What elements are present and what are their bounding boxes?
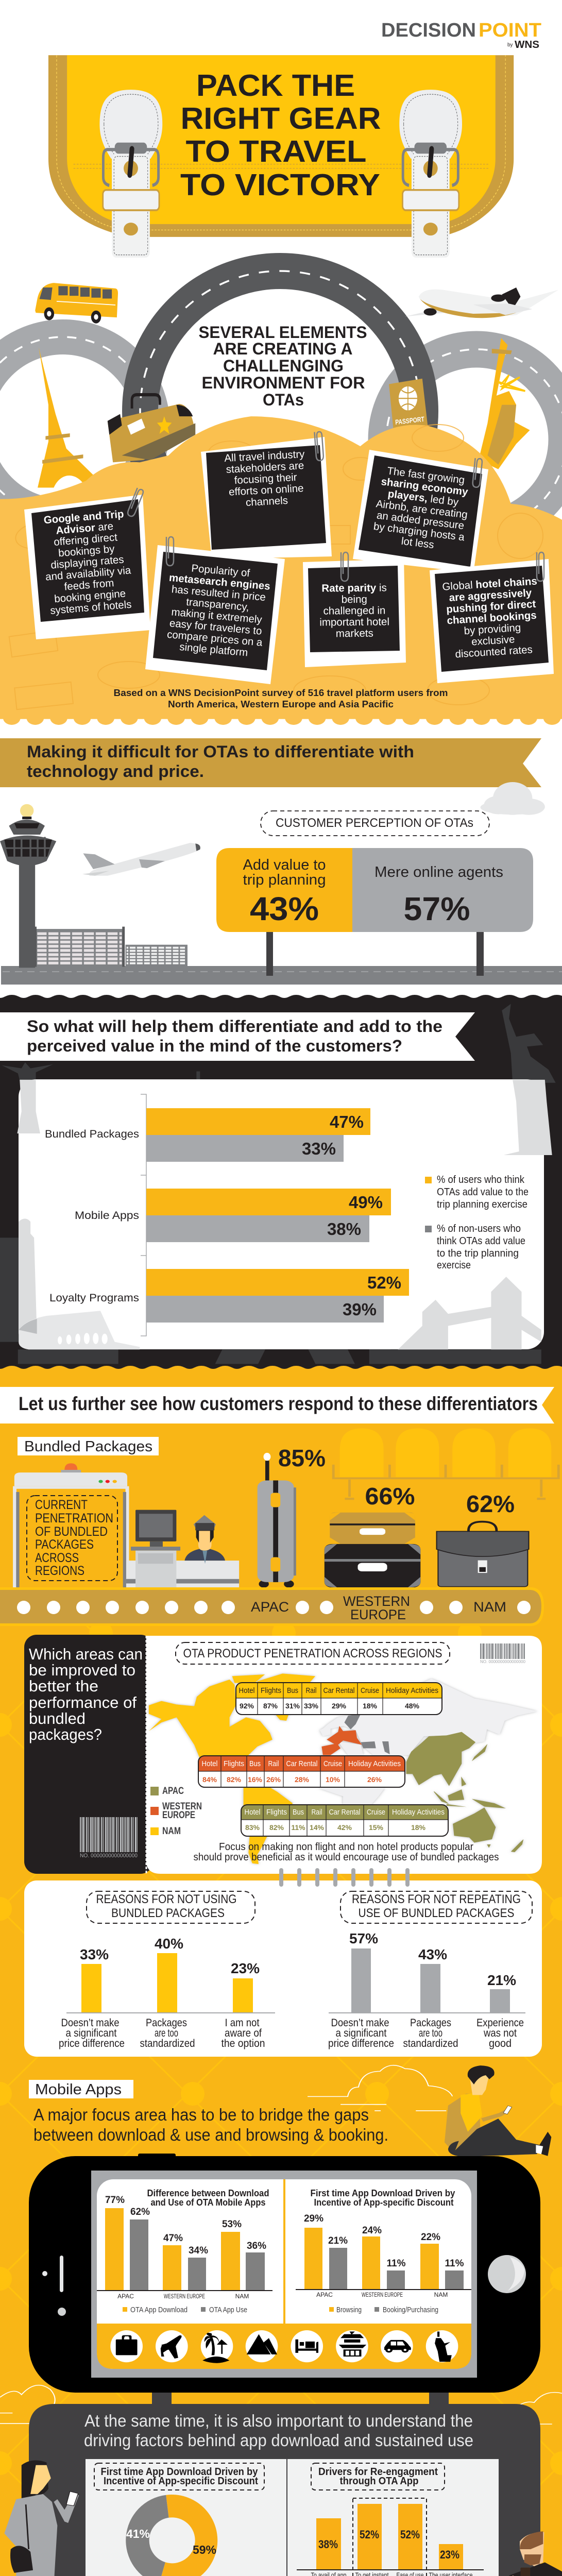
title: PACK THE	[196, 69, 355, 103]
table: Western Europe: Hotel	[202, 1759, 217, 1768]
chart: download vs use: APAC	[117, 2293, 134, 2300]
polaroid: metasearch engines: metasearch engines	[168, 572, 271, 592]
polaroid: google and trip advisor: feeds from	[64, 577, 114, 593]
chart: app download incentive: NAM	[434, 2291, 448, 2298]
table: Western Europe: 26%	[367, 1775, 382, 1784]
icon: statue of liberty	[479, 338, 530, 469]
polaroid: sharing economy: Airbnb, are creating	[376, 498, 468, 521]
polaroid: rate parity: challenged in	[323, 604, 385, 617]
chart: drivers for re-engagement: 23%	[440, 2548, 459, 2561]
chart legend: trip planning exercise	[437, 1199, 527, 1210]
text: major focus area	[33, 2105, 388, 2144]
logo: DecisionPoint by WNS: POINT	[479, 20, 541, 41]
panel: OTA product penetration map: OTA PRODUCT PENETRATION ACROSS REGIONS	[183, 1647, 442, 1660]
hero: travel bag flap	[48, 55, 514, 258]
decorative outline clouds	[0, 2065, 562, 2424]
icon: passport: PASSPORT	[395, 415, 425, 426]
billboard: mere online agents 57%	[352, 848, 533, 932]
table: APAC: 11%	[291, 1823, 305, 1832]
polaroid: metasearch engines: transparency,	[185, 596, 250, 613]
laptop with driver charts	[29, 2404, 540, 2576]
chart: download vs use: 36%	[247, 2241, 266, 2251]
panel: ticket stub question: packages?	[29, 1725, 102, 1743]
panel: reasons for not using / repeating	[24, 1870, 542, 2057]
landmark silhouettes on dark	[0, 1004, 556, 1364]
chart: reasons for not using: the option	[222, 2038, 265, 2049]
tag: mobile apps: Mobile Apps	[35, 2081, 122, 2098]
conveyor belt with region labels: APAC	[251, 1599, 289, 1615]
chart: reasons for not using: BUNDLED PACKAGES	[111, 1906, 225, 1920]
heading: several elements: CHALLENGING	[223, 357, 344, 375]
polaroid: google and trip advisor: systems of hotels	[50, 599, 132, 617]
laptop with driver charts: At the same time, it is also important to understand the	[84, 2411, 473, 2430]
table: Western Europe: Cruise	[323, 1759, 342, 1768]
panel: ticket stub question: Which areas can	[29, 1645, 143, 1663]
chart: reasons for not using: 23%	[231, 1960, 260, 1976]
polaroid: all travel industry stakeholders	[201, 432, 332, 559]
chart: reasons for not repeating: standardized	[403, 2038, 458, 2049]
table: NAM: 92%	[240, 1702, 254, 1710]
heading: several elements	[199, 323, 367, 409]
table: NAM: Hotel	[239, 1686, 254, 1695]
polaroid: sharing economy: players, led by	[387, 488, 459, 509]
polaroid: all travel industry stakeholders: efforts on online	[229, 482, 304, 498]
title: RIGHT GEAR	[180, 101, 381, 135]
polaroid: rate parity: important hotel	[319, 616, 389, 629]
chart: drivers for re-engagement: 38%	[318, 2538, 338, 2551]
bars: mobile apps: Mobile Apps	[75, 1210, 139, 1222]
conveyor belt with region labels: EUROPE	[350, 1607, 406, 1622]
illustration: security scanner with label	[13, 1463, 129, 1587]
chart: app download incentive: WESTERN EUROPE	[362, 2291, 403, 2298]
table: Western Europe: Holiday Activities	[348, 1759, 401, 1768]
chart: reasons for not using: Packages	[146, 2017, 187, 2029]
chart legend: % of users who think	[437, 1174, 525, 1185]
table: Western Europe: 84%	[202, 1775, 217, 1784]
chart: download vs use: OTA App Use	[209, 2306, 247, 2314]
bars: bundled packages: 33%	[302, 1139, 336, 1158]
bars: mobile apps: 49%	[349, 1193, 383, 1212]
table: NAM: 33%	[304, 1702, 319, 1710]
chart: donut first time download: 59%	[193, 2543, 216, 2556]
chart legend: exercise	[437, 1260, 471, 1271]
panel: ticket stub question: performance of	[29, 1693, 137, 1711]
illustration: security scanner with label: REGIONS	[35, 1564, 84, 1578]
chart: download vs use: and Use of OTA Mobile Apps	[150, 2197, 266, 2208]
polaroid: global hotel chains: Global hotel chains	[442, 575, 537, 593]
table: NAM: 29%	[332, 1702, 347, 1710]
table: NAM: Rail	[306, 1686, 316, 1695]
panel: differentiators bar chart	[17, 1079, 552, 1349]
table: NAM	[236, 1683, 442, 1715]
table: APAC: Bus	[293, 1808, 304, 1817]
logo: DecisionPoint by WNS	[381, 20, 541, 50]
roads	[0, 271, 562, 551]
panel: ticket stub question: be improved to	[29, 1661, 135, 1679]
table: APAC: Rail	[311, 1808, 322, 1817]
table: APAC: Cruise	[367, 1808, 385, 1817]
table: NAM: 18%	[363, 1702, 378, 1710]
ribbon heading: what will help them differentiate	[0, 1012, 475, 1061]
bars: bundled packages: 47%	[330, 1112, 364, 1131]
chart: reasons for not using: I am not	[225, 2017, 260, 2029]
icon: passport	[389, 379, 429, 439]
chart: download vs use: OTA App Download	[130, 2306, 188, 2314]
illustration: airport seats	[333, 1428, 558, 1499]
polaroid: global hotel chains: are aggressively	[449, 587, 532, 604]
table: Western Europe: 16%	[248, 1775, 263, 1784]
chart: drivers for re-engagement: 52%	[400, 2528, 420, 2541]
table: Western Europe: Rail	[268, 1759, 279, 1768]
polaroid: google and trip advisor: booking engine	[54, 587, 126, 605]
ribbon heading: making it difficult: Making it difficult for OTAs to differentiate with	[27, 742, 414, 761]
billboard: add value 43%: 43%	[250, 890, 319, 927]
table: Western Europe: Car Rental	[286, 1759, 317, 1768]
table: NAM: Cruise	[361, 1686, 379, 1695]
barcode	[80, 1835, 138, 1859]
survey note	[113, 688, 448, 709]
polaroid: sharing economy	[353, 450, 488, 573]
polaroid: sharing economy: The fast growing	[386, 465, 465, 486]
polaroid: global hotel chains: channel bookings	[447, 609, 537, 626]
chart: app download incentive: 22%	[421, 2232, 440, 2243]
heading: several elements: ARE CREATING A	[213, 340, 352, 358]
table: Western Europe: 26%	[266, 1775, 281, 1784]
polaroid: google and trip advisor: and availability via	[45, 564, 132, 583]
conveyor belt with region labels	[0, 1587, 544, 1626]
polaroid: sharing economy: sharing economy	[381, 476, 469, 498]
panel: OTA product penetration map: NO. 0000000000000000	[480, 1659, 526, 1664]
table: NAM: Car Rental	[323, 1686, 354, 1695]
table: NAM: Flights	[261, 1686, 281, 1695]
chart: app download incentive: 11%	[445, 2258, 464, 2269]
chart: drivers for re-engagement: 52%	[360, 2528, 379, 2541]
table: APAC: 42%	[337, 1823, 352, 1832]
chart: reasons for not repeating: was not	[483, 2027, 517, 2039]
tag: bundled packages: Bundled Packages	[24, 1438, 152, 1455]
map note	[194, 1841, 499, 1863]
map legend	[150, 1786, 202, 1837]
bars: mobile apps	[75, 1189, 391, 1242]
map legend: WESTERN	[162, 1801, 202, 1812]
polaroid: google and trip advisor: offering direct	[53, 531, 118, 548]
table: NAM: Holiday Activities	[386, 1686, 438, 1695]
bars: loyalty programs	[49, 1269, 409, 1323]
chart: app download incentive: Incentive of App-specific Discount	[314, 2197, 454, 2208]
chart: drivers for re-engagement: through OTA App	[340, 2476, 418, 2487]
bars: loyalty programs: Loyalty Programs	[49, 1292, 139, 1304]
world map	[149, 1673, 537, 1864]
table: NAM: 31%	[285, 1702, 300, 1710]
table: APAC	[241, 1805, 448, 1836]
chart: download vs use: Difference between Download	[147, 2188, 269, 2198]
polaroid: global hotel chains: pushing for direct	[446, 598, 536, 615]
chart: donut first time download: First time App Download Driven by	[101, 2466, 258, 2478]
conveyor belt with region labels: WESTERN	[343, 1594, 410, 1609]
title: TO TRAVEL	[185, 134, 367, 168]
illustration: check-in counter and agent	[126, 1510, 239, 1587]
chart: download vs use: NAM	[235, 2293, 249, 2300]
map note: should prove beneficial as it would encourage use of bundled packages	[194, 1852, 499, 1863]
chart: reasons for not repeating: USE OF BUNDLED PACKAGES	[359, 1906, 514, 1920]
chart: app download incentive: 24%	[362, 2225, 382, 2236]
polaroid: google and trip advisor: Google and Trip	[43, 508, 124, 526]
map legend: APAC	[162, 1786, 184, 1797]
bars: mobile apps: 38%	[327, 1219, 361, 1239]
polaroid: rate parity: Rate parity is	[321, 582, 387, 595]
polaroid: rate parity: being	[342, 594, 367, 605]
illustration: security scanner with label: CURRENT	[35, 1498, 88, 1512]
bars: loyalty programs: 52%	[367, 1273, 401, 1292]
panel: ticket stub question: better the	[29, 1677, 98, 1695]
polaroid: global hotel chains: by providing	[464, 622, 521, 637]
illustration: luggage with regional percentages: 85%	[278, 1445, 326, 1471]
icon: airplane	[405, 287, 558, 318]
illustration: security scanner with label: PENETRATION	[35, 1511, 113, 1526]
survey note: North America, Western Europe and Asia Pacific	[168, 699, 394, 709]
table: Western Europe	[198, 1756, 405, 1787]
title	[180, 69, 381, 202]
phone with app charts	[29, 2154, 540, 2393]
chart: download vs use: 77%	[105, 2195, 125, 2206]
illustration: bearded man with phone	[503, 2531, 562, 2576]
barcode: NO. 0000000000000000	[80, 1853, 138, 1859]
chart legend	[425, 1174, 529, 1271]
logo: DecisionPoint by WNS: DECISION	[381, 20, 476, 41]
billboard: mere online agents 57%: Mere online agents	[374, 864, 503, 880]
chart: reasons for not repeating: good	[489, 2038, 512, 2049]
chart: reasons for not using	[59, 1891, 275, 2049]
map legend: EUROPE	[162, 1810, 195, 1821]
chart: reasons for not using: aware of	[225, 2027, 262, 2039]
laptop stand legs	[152, 2385, 449, 2409]
logo: DecisionPoint by WNS: WNS	[515, 39, 539, 50]
map note: Focus on making non flight and non hotel products popular	[219, 1841, 473, 1853]
title: TO VICTORY	[180, 168, 380, 202]
polaroid: metasearch engines: making it extremely	[171, 606, 263, 626]
bars: loyalty programs: 39%	[343, 1300, 377, 1319]
chart: app download incentive: Booking/Purchasing	[383, 2306, 438, 2314]
heading: several elements: OTAs	[263, 391, 304, 409]
chart: donut first time download	[94, 2463, 264, 2576]
stamp cloud background	[0, 416, 562, 726]
bars: bundled packages	[45, 1108, 370, 1162]
chart: reasons for not repeating: 21%	[487, 1972, 516, 1988]
chart: donut first time download: Incentive of App-specific Discount	[104, 2476, 258, 2487]
chart: reasons for not repeating: 57%	[349, 1930, 378, 1946]
icon: departing airplane	[82, 843, 200, 876]
chart: reasons for not repeating: Doesn’t make	[331, 2017, 389, 2029]
phone home button	[488, 2255, 526, 2293]
ribbon heading: what will help them differentiate: perceived value in the mind of the customers?	[27, 1037, 402, 1055]
polaroid: rate parity: markets	[336, 628, 373, 639]
yellow section background with lattice	[0, 1365, 562, 2576]
panel: customer perception of OTAs: CUSTOMER PERCEPTION OF OTAs	[276, 816, 473, 830]
chart: reasons for not repeating	[328, 1891, 532, 2049]
landmark silhouettes on panel	[17, 1080, 552, 1349]
chart: app download incentive: 29%	[304, 2213, 323, 2224]
heading: several elements: SEVERAL ELEMENTS	[199, 323, 367, 342]
icon: cloud	[481, 782, 545, 815]
table: APAC: 18%	[411, 1823, 426, 1832]
billboard: add value 43%: Add value to	[243, 857, 326, 873]
table: APAC: Flights	[266, 1808, 287, 1817]
panel: ticket stub question	[24, 1635, 153, 1874]
illustration: security scanner with label: ACROSS	[35, 1551, 79, 1565]
billboard: add value 43%	[216, 848, 352, 932]
table: NAM: 87%	[263, 1702, 278, 1710]
chart: drivers for re-engagement: Drivers for Re-engagment	[318, 2466, 438, 2478]
chart: app download incentive	[296, 2188, 471, 2314]
billboard: mere online agents 57%: 57%	[404, 890, 470, 927]
polaroid: all travel industry stakeholders: channels	[245, 495, 288, 509]
polaroid: metasearch engines: compare prices on a	[166, 629, 263, 649]
chart: reasons for not repeating: Packages	[410, 2017, 451, 2029]
chart: reasons for not using: are too	[155, 2027, 178, 2039]
panel: customer perception of OTAs	[216, 811, 533, 976]
table: APAC: 15%	[369, 1823, 384, 1832]
icon: bus	[35, 283, 118, 324]
chart: reasons for not repeating: REASONS FOR NOT REPEATING	[352, 1892, 521, 1906]
polaroid: all travel industry stakeholders: focusing their	[234, 471, 297, 486]
chart: app download incentive: APAC	[316, 2291, 333, 2298]
polaroid: metasearch engines: Popularity of	[191, 562, 250, 579]
map legend: NAM	[162, 1826, 181, 1837]
table: APAC: 83%	[245, 1823, 260, 1832]
chart: app download incentive: Browsing	[336, 2306, 362, 2314]
chart: reasons for not using: REASONS FOR NOT USING	[96, 1892, 237, 1906]
ribbon heading: what will help them differentiate: So what will help them differentiate and add to the	[27, 1017, 442, 1036]
illustration: control tower and terminal	[0, 804, 188, 968]
polaroid: rate parity	[303, 552, 406, 667]
polaroid: google and trip advisor: Advisor are	[56, 520, 114, 537]
tag: mobile apps	[29, 2080, 133, 2098]
illustration: man sitting on phone	[445, 2065, 551, 2157]
panel: ticket stub question: bundled	[29, 1709, 86, 1727]
laptop with driver charts: driving factors behind app download and sustained use	[84, 2431, 473, 2450]
table: Western Europe: Flights	[224, 1759, 244, 1768]
polaroid: sharing economy: an added pressure	[376, 510, 465, 532]
chart legend: think OTAs add value	[437, 1235, 525, 1247]
chart: app download incentive: 21%	[328, 2235, 348, 2246]
polaroid: global hotel chains: exclusive	[471, 633, 515, 648]
polaroid: all travel industry stakeholders: All travel industry	[224, 448, 305, 464]
chart: reasons for not repeating: are too	[419, 2027, 442, 2039]
table: APAC: 82%	[269, 1823, 284, 1832]
table: APAC: Holiday Activities	[392, 1808, 445, 1817]
chart legend: OTAs add value to the	[437, 1187, 529, 1198]
polaroid: global hotel chains: discounted rates	[455, 643, 533, 660]
chart: download vs use: 53%	[222, 2219, 242, 2230]
chart: donut first time download: 41%	[126, 2527, 150, 2540]
survey note: Based on a WNS DecisionPoint survey of 516 travel platform users from	[113, 688, 448, 698]
illustration: woman with phone	[4, 2461, 79, 2576]
chart: app download incentive: First time App Download Driven by	[310, 2188, 455, 2198]
illustration: luggage with regional percentages	[258, 1445, 529, 1588]
polaroid: sharing economy: by charging hosts a	[373, 520, 466, 544]
chart legend: % of non-users who	[437, 1223, 521, 1234]
chart: reasons for not repeating: Experience	[476, 2017, 524, 2029]
chart: drivers for re-engagement	[297, 2463, 484, 2576]
text: major focus area: A major focus area has to be to bridge the gaps	[33, 2105, 369, 2124]
polaroid: metasearch engines: has resulted in price	[171, 583, 266, 603]
polaroid: google and trip advisor	[24, 488, 150, 639]
airport runway road	[1, 966, 562, 985]
chart: download vs use: 34%	[189, 2245, 208, 2256]
billboard: add value 43%: trip planning	[243, 872, 326, 888]
chart: download vs use	[97, 2188, 273, 2314]
polaroid: metasearch engines: single platform	[179, 641, 248, 658]
ribbon heading: making it difficult: technology and price.	[27, 762, 204, 781]
table: Western Europe: 28%	[295, 1775, 310, 1784]
icon: suitcase	[108, 395, 195, 462]
chart: reasons for not using: price difference	[59, 2038, 125, 2049]
chart: reasons for not repeating: price difference	[328, 2038, 394, 2049]
chart: reasons for not using: standardized	[140, 2038, 195, 2049]
table: Western Europe: Bus	[249, 1759, 261, 1768]
chart: reasons for not using: Doesn’t make	[61, 2017, 120, 2029]
polaroid: google and trip advisor: bookings by	[58, 543, 115, 559]
illustration: luggage with regional percentages: 62%	[466, 1490, 515, 1517]
chart: reasons for not using: 33%	[80, 1946, 109, 1962]
dark section background	[0, 994, 562, 1371]
polaroid: metasearch engines	[145, 537, 285, 684]
ribbon heading: further see how customers respond	[0, 1387, 554, 1423]
chart: download vs use: 62%	[130, 2207, 150, 2217]
chart: reasons for not repeating: 43%	[418, 1946, 447, 1962]
travel icons row	[110, 2330, 458, 2363]
chart: reasons for not using: a significant	[66, 2027, 117, 2039]
chart: reasons for not using: 40%	[155, 1936, 183, 1952]
chart: reasons for not repeating: a significant	[336, 2027, 387, 2039]
illustration: security scanner with label: OF BUNDLED	[35, 1524, 108, 1539]
illustration: luggage with regional percentages: 66%	[365, 1483, 415, 1510]
table: NAM: Bus	[287, 1686, 298, 1695]
logo: DecisionPoint by WNS: by	[507, 42, 513, 48]
table: APAC: Hotel	[244, 1808, 261, 1817]
polaroid: global hotel chains	[430, 552, 554, 683]
chart legend: to the trip planning	[437, 1248, 519, 1259]
polaroid: all travel industry stakeholders: stakeholders are	[226, 460, 304, 476]
polaroid: metasearch engines: easy for travelers to	[169, 617, 262, 637]
text: major focus area: between download & use and browsing & booking.	[33, 2125, 388, 2144]
panel: OTA product penetration map	[146, 1636, 542, 1874]
polaroid: google and trip advisor: displaying rates	[50, 553, 124, 571]
table: NAM: 48%	[405, 1702, 420, 1710]
table: Western Europe: 10%	[326, 1775, 340, 1784]
chart: download vs use: 47%	[163, 2233, 183, 2244]
bars: bundled packages: Bundled Packages	[45, 1128, 139, 1140]
chart: app download incentive: 11%	[387, 2258, 406, 2269]
table: Western Europe: 82%	[227, 1775, 242, 1784]
chart: download vs use: WESTERN EUROPE	[164, 2293, 205, 2300]
table: APAC: 14%	[310, 1823, 325, 1832]
icon: eiffel tower	[38, 347, 97, 487]
heading: several elements: ENVIRONMENT FOR	[202, 374, 365, 392]
polaroid: sharing economy: lot less	[401, 535, 435, 551]
conveyor belt with region labels: NAM	[473, 1599, 506, 1615]
table: APAC: Car Rental	[329, 1808, 361, 1817]
illustration: security scanner with label: PACKAGES	[35, 1537, 94, 1552]
ribbon heading: making it difficult	[0, 738, 541, 787]
